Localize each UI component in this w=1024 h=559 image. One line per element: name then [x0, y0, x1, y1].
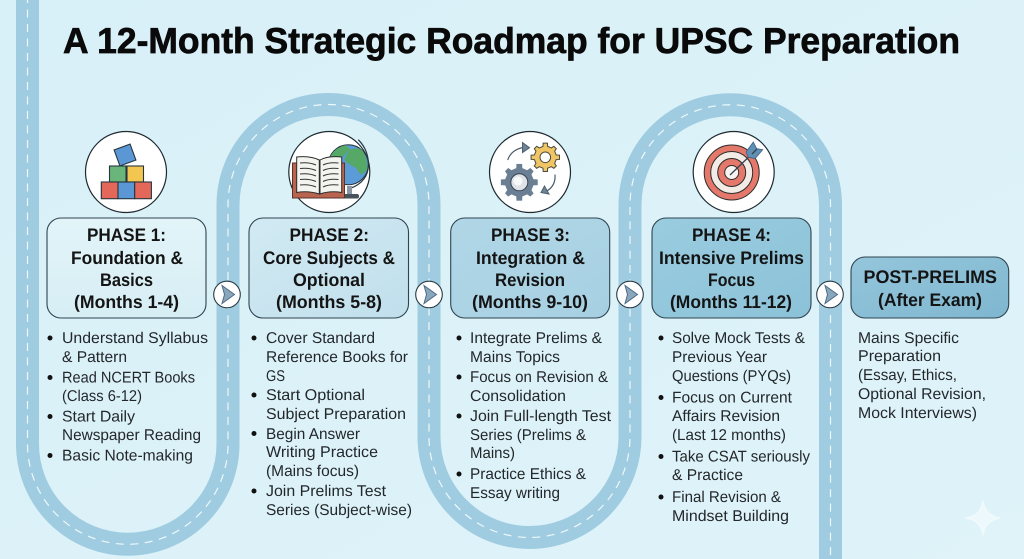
post-prelims description: Mains Specific [858, 330, 959, 347]
phase 2 task list: Writing Practice [266, 444, 378, 461]
post-prelims description: Mock Interviews) [858, 405, 977, 422]
phase 2 header box: (Months 5-8) [276, 292, 382, 312]
phase 2 task list: Cover Standard [266, 330, 375, 347]
phase 4 task list [658, 330, 810, 525]
post-prelims header box: POST-PRELIMS [864, 267, 997, 287]
panel: phase 4 [652, 132, 811, 525]
phase 2 task list: Start Optional [266, 387, 365, 404]
phase 1 task list: Start Daily [62, 408, 135, 426]
phase 3 task list: Practice Ethics & [470, 466, 587, 483]
phase 4 task list: Questions (PYQs) [672, 368, 791, 385]
phase 1 task list: Newspaper Reading [62, 427, 201, 444]
phase 1 header box: (Months 1-4) [74, 292, 179, 312]
panel: post-prelims [851, 257, 1009, 422]
phase 3 header box: PHASE 3: [491, 225, 570, 245]
panel: phase 1 [47, 132, 208, 464]
phase 3 header box: Revision [495, 270, 565, 290]
phase 1 task list: Read NCERT Books [62, 370, 195, 386]
post-prelims description: (Essay, Ethics, [858, 367, 957, 384]
phase 4 task list: & Practice [672, 467, 743, 484]
phase 2 task list: GS [266, 368, 285, 385]
phase 1 task list: Basic Note-making [62, 448, 193, 464]
phase 2 header box: Optional [293, 270, 365, 290]
phase 2 header box: Core Subjects & [263, 248, 395, 268]
post-prelims description: Optional Revision, [858, 386, 986, 403]
phase 4 header box: Focus [708, 270, 755, 290]
post-prelims description: Preparation [858, 348, 941, 365]
phase 3 task list: Focus on Revision & [470, 369, 609, 386]
phase 3 header box: (Months 9-10) [472, 292, 588, 312]
title: A 12-Month Strategic Roadmap for UPSC Preparation [63, 20, 960, 61]
icon: open book and globe [289, 132, 370, 212]
phase 3 task list: Mains) [470, 445, 515, 462]
phase 2 task list: Series (Subject-wise) [266, 502, 412, 519]
panel: phase 2 [249, 132, 412, 519]
phase 1 task list: Understand Syllabus [62, 330, 208, 347]
post-prelims header box [851, 257, 1009, 318]
arrow: phase 1 to phase 2 [214, 281, 240, 308]
phase 1 task list [48, 330, 208, 464]
phase 2 task list: Reference Books for [266, 349, 408, 366]
phase 3 task list: Essay writing [470, 485, 560, 502]
phase 4 task list: Mindset Building [672, 508, 789, 525]
post-prelims description [858, 330, 986, 422]
phase 1 task list: & Pattern [62, 349, 127, 366]
phase 4 task list: Take CSAT seriously [672, 448, 810, 466]
phase 4 header box: (Months 11-12) [670, 292, 792, 312]
phase 1 header box: Basics [100, 270, 153, 290]
phase 4 task list: (Last 12 months) [672, 427, 786, 444]
phase 3 task list: Join Full-length Test [470, 408, 612, 425]
phase 2 task list: (Mains focus) [266, 463, 359, 480]
phase 2 task list [252, 330, 412, 519]
phase 3 task list: Mains Topics [470, 349, 560, 366]
icon: gears with cycle arrows [490, 132, 570, 212]
icon: building blocks [86, 132, 166, 212]
phase 1 task list: (Class 6-12) [62, 388, 142, 405]
winding road [28, 0, 830, 559]
phase 4 header box: Intensive Prelims [659, 248, 804, 268]
phase 2 task list: Begin Answer [266, 426, 360, 443]
phase 4 task list: Final Revision & [672, 489, 782, 506]
phase 2 task list: Subject Preparation [266, 406, 406, 423]
phase 3 task list: Consolidation [470, 388, 566, 405]
icon: sparkle watermark [966, 501, 1000, 535]
panel: phase 3 [451, 132, 612, 502]
phase 3 task list [456, 330, 612, 502]
arrow: phase 3 to phase 4 [617, 281, 643, 308]
phase 2 task list: Join Prelims Test [266, 483, 387, 500]
phase 4 task list: Focus on Current [672, 390, 793, 406]
icon: target with arrow [693, 132, 774, 212]
post-prelims header box: (After Exam) [878, 290, 982, 310]
phase 3 header box [451, 218, 610, 318]
phase 3 task list: Integrate Prelims & [470, 330, 603, 347]
phase 1 header box [47, 218, 206, 318]
phase 4 task list: Affairs Revision [672, 408, 780, 425]
phase 2 header box [249, 218, 408, 318]
phase 4 task list: Solve Mock Tests & [672, 330, 806, 347]
phase 4 header box: PHASE 4: [692, 225, 771, 245]
arrow: phase 2 to phase 3 [416, 281, 442, 308]
phase 3 task list: Series (Prelims & [470, 427, 587, 444]
phase 3 header box: Integration & [476, 248, 585, 268]
phase 4 header box [652, 218, 811, 318]
arrow: phase 4 to post-prelims [817, 281, 843, 308]
phase 1 header box: PHASE 1: [87, 225, 166, 245]
phase 2 header box: PHASE 2: [290, 225, 369, 245]
phase 4 task list: Previous Year [672, 349, 767, 366]
phase 1 header box: Foundation & [71, 248, 183, 268]
